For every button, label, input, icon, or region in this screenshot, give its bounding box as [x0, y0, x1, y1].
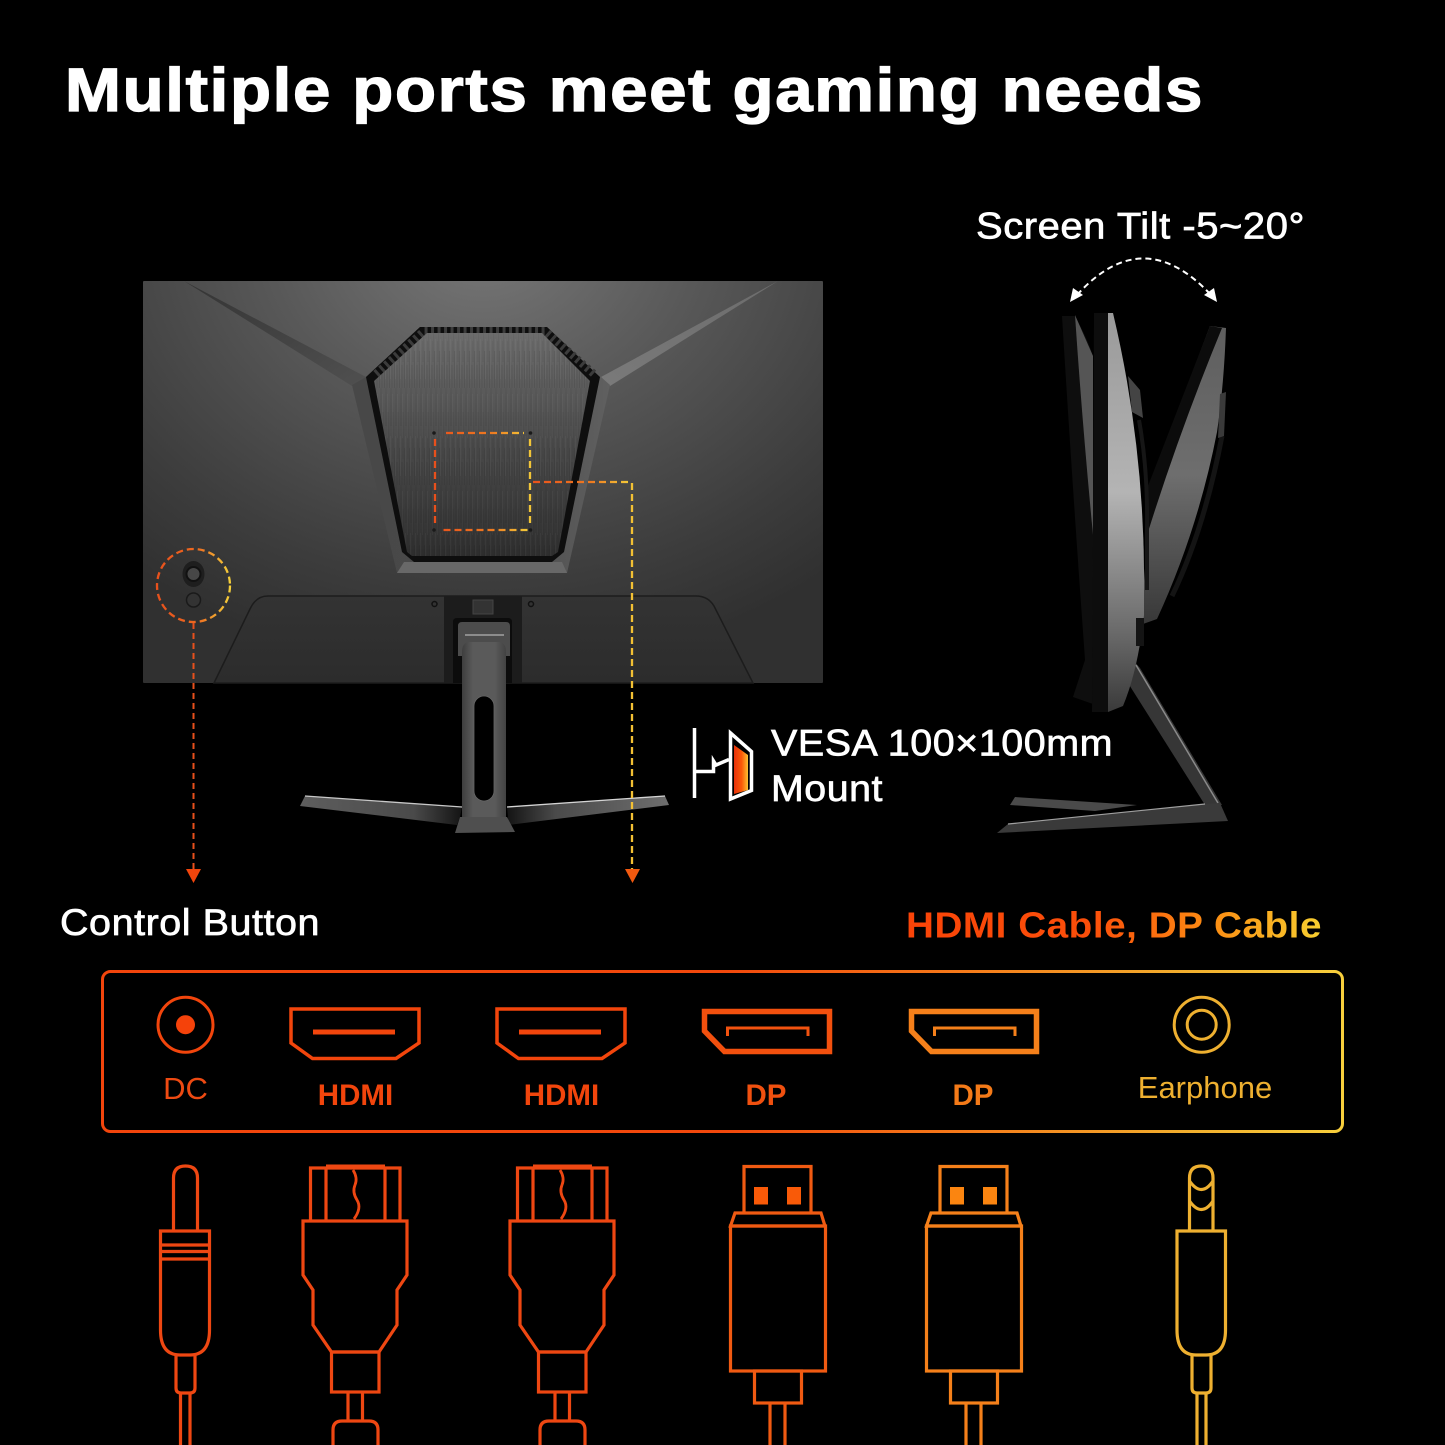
control button label: Control Button: [60, 902, 320, 943]
cable: DP 2: [926, 1166, 1022, 1445]
VESA text: Mount: [771, 768, 883, 809]
arrow: to control button label: [186, 869, 201, 883]
neck: [462, 642, 506, 818]
callout: control button circle: [157, 549, 230, 870]
port: HDMI 2: [497, 1009, 625, 1112]
base lower bar: [997, 803, 1228, 833]
control buttons: [182, 561, 204, 607]
cable: DP 1: [730, 1166, 826, 1445]
cable: DC jack: [160, 1166, 210, 1445]
port: HDMI 1: [291, 1009, 419, 1112]
port: DC: DC: [163, 1071, 208, 1106]
cable: HDMI 1: [303, 1167, 407, 1445]
cable: HDMI 2: [510, 1167, 614, 1445]
VESA text: [771, 722, 1113, 809]
port: DP 2: DP: [953, 1079, 993, 1112]
stand socket: [444, 596, 522, 683]
vent housing: [366, 327, 600, 562]
screen tilted back: [1062, 315, 1093, 704]
mount holes: [432, 431, 532, 532]
arrow: to ports: [625, 869, 640, 883]
screws: [432, 602, 534, 606]
right foot: [507, 796, 669, 825]
panel: port strip: [102, 972, 1342, 1132]
neck slot: [474, 696, 494, 801]
port: DP 1: DP: [746, 1079, 786, 1112]
screen upright: [1092, 313, 1147, 712]
left foot: [300, 796, 462, 825]
icon: VESA mount: [694, 728, 752, 799]
port: Earphone: Earphone: [1138, 1070, 1272, 1105]
tilt arrow: [1070, 258, 1217, 302]
port: Earphone: [1138, 997, 1272, 1105]
monitor stand: [300, 622, 669, 833]
leader line to ports: [533, 481, 632, 483]
VESA text: VESA 100×100mm: [771, 722, 1113, 764]
center housing: [352, 327, 610, 573]
port: DP 1: [704, 1012, 830, 1112]
base upper fin: [1010, 797, 1137, 811]
monitor back panel: [143, 281, 823, 683]
right arm: [601, 281, 778, 386]
vent slots: [376, 331, 594, 374]
port: HDMI 2: HDMI: [524, 1079, 599, 1112]
port: HDMI 1: HDMI: [318, 1079, 393, 1112]
screen tilted forward: [1143, 326, 1226, 624]
callout: VESA square: [432, 431, 632, 870]
brushed center plate: [374, 333, 590, 556]
title: Multiple ports meet gaming needs: [65, 56, 1204, 124]
left arm: [184, 281, 366, 386]
stand head: [458, 622, 510, 656]
monitor side view: [997, 313, 1228, 833]
tilt label: Screen Tilt -5~20°: [976, 206, 1305, 246]
monitor rear view: [143, 281, 823, 683]
base collar: [455, 817, 515, 833]
stand arm: [1128, 660, 1222, 805]
port: DC: [158, 997, 213, 1106]
lower back panel: [214, 596, 753, 683]
cable label: HDMI Cable, DP Cable: [906, 904, 1322, 946]
cable: Earphone jack: [1177, 1166, 1226, 1445]
port: DP 2: [912, 1012, 1036, 1112]
